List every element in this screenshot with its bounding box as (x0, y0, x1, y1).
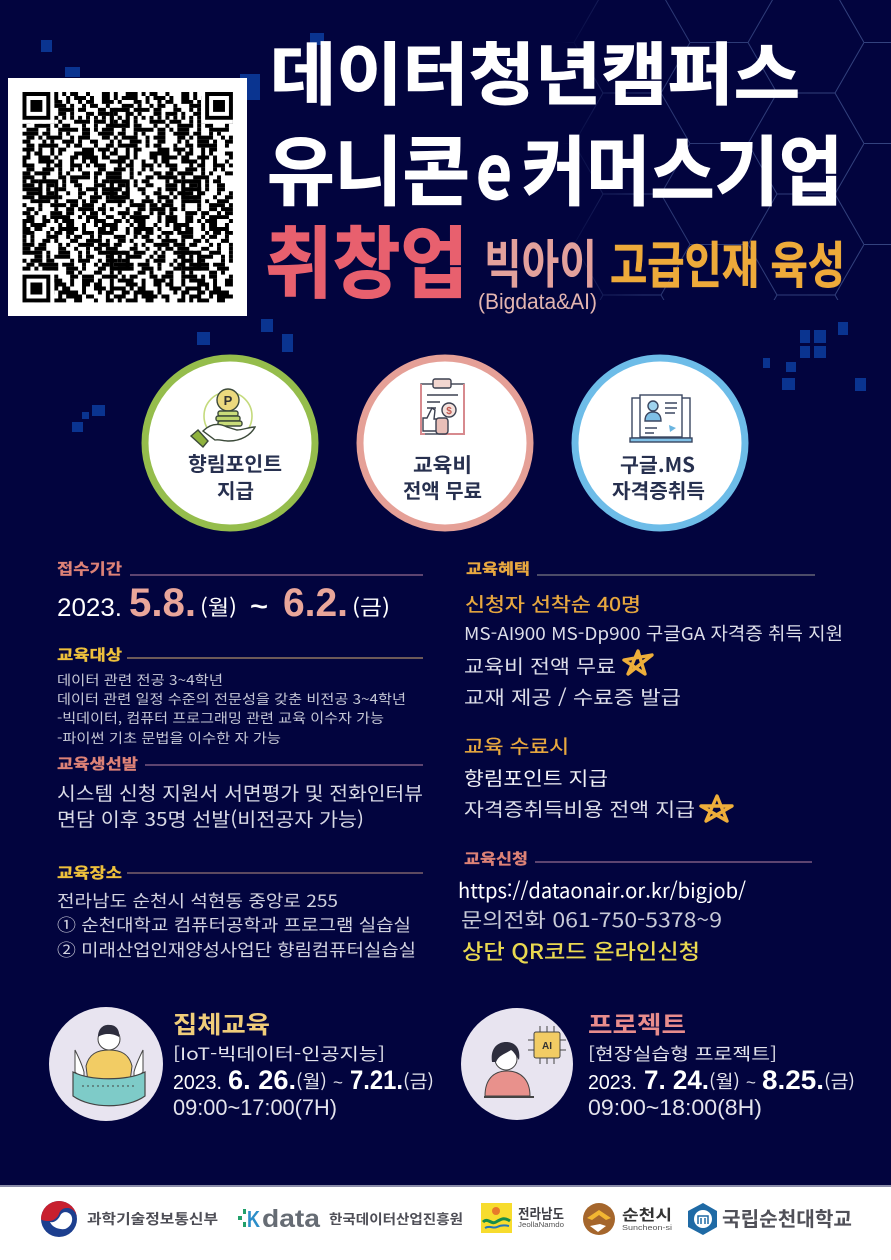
logo: Jeollanam-do: 전라남도 (518, 1204, 564, 1224)
logo: Sunchon National University: 국립순천대학교 (722, 1203, 852, 1232)
benefit badge: free tuition (360, 358, 530, 528)
panel: project: [현장실습형 프로젝트] (588, 1040, 777, 1065)
panel: application period: 5.8. (129, 581, 196, 625)
panel: location: 교육장소 (57, 862, 122, 883)
panel: location: ① 순천대학교 컴퓨터공학과 프로그램 실습실 (57, 911, 411, 936)
panel: benefits: 교육혜택 (466, 558, 530, 579)
panel: project: (월) (709, 1068, 740, 1094)
panel: classroom training: 6. 26. (228, 1065, 296, 1095)
logo: K-data: K (247, 1206, 260, 1232)
panel: benefits: 자격증취득비용 전액 지급 (464, 795, 695, 822)
logo: ministry: 과학기술정보통신부 (87, 1209, 218, 1229)
logo: ministry (41, 1201, 218, 1237)
footer: logos (0, 1185, 891, 1260)
illustration: person with AI chip (461, 1008, 573, 1120)
panel: eligibility: 데이터 관련 일정 수준의 전문성을 갖춘 비전공 3~4학년 (57, 688, 406, 708)
benefit badge: points (145, 358, 315, 528)
panel: classroom training: [IoT-빅데이터-인공지능] (173, 1040, 385, 1065)
icon: clipboard: $ (446, 406, 452, 417)
icon: laptop resume (630, 395, 692, 442)
title: (Bigdata&AI) (478, 289, 597, 314)
panel: benefits: MS-AI900 MS-Dp900 구글GA 자격증 취득 지원 (464, 620, 843, 646)
panel: location: ② 미래산업인재양성사업단 향림컴퓨터실습실 (57, 936, 416, 961)
panel: classroom training (49, 1005, 434, 1121)
panel: how to apply: 문의전화 061-750-5378~9 (461, 904, 722, 933)
logo: K-data (238, 1205, 463, 1233)
panel: project (461, 1005, 855, 1120)
benefit badge: free tuition: 교육비 (413, 449, 472, 478)
panel: application period: (금) (352, 592, 390, 622)
icon: star (624, 651, 652, 674)
panel: selection: 교육생선발 (57, 753, 138, 774)
panel: project: (금) (824, 1068, 855, 1094)
panel: benefits: 교육 수료시 (464, 732, 569, 759)
icon: coins in hand: P (224, 393, 233, 408)
benefit badge: points: 향림포인트 (188, 448, 282, 477)
panel: application period: 6.2. (283, 581, 348, 625)
panel: benefits: 향림포인트 지급 (464, 764, 608, 791)
benefit badge: certification (575, 358, 745, 528)
illustration: person with tablet (49, 1007, 163, 1121)
panel: benefits: 교육비 전액 무료 (464, 652, 616, 679)
title: 유니콘 (267, 111, 470, 221)
panel: project: 09:00~18:00(8H) (588, 1095, 762, 1120)
panel: project: 8.25. (762, 1065, 824, 1095)
panel: benefits: 교재 제공 / 수료증 발급 (464, 683, 681, 710)
panel: location (57, 862, 423, 961)
logo: K-data: data (262, 1205, 321, 1233)
benefit badge: points: 지급 (217, 475, 254, 504)
panel: how to apply: https://dataonair.or.kr/bigjob/ (458, 875, 746, 904)
title (265, 20, 845, 314)
panel: classroom training: ~ (333, 1073, 343, 1092)
panel: application period: ~ (250, 591, 268, 621)
panel: selection: 시스템 신청 지원서 서면평가 및 전화인터뷰 (57, 779, 423, 806)
title: e (476, 111, 512, 221)
title: 빅아이 (484, 223, 597, 298)
icon: coins in hand (191, 389, 255, 447)
panel: benefits: 신청자 선착순 40명 (465, 590, 641, 617)
logo: Jeollanam-do (481, 1203, 564, 1233)
panel: eligibility (57, 644, 423, 747)
logo: Suncheon: 순천시 (622, 1204, 672, 1225)
panel: how to apply: 교육신청 (464, 848, 528, 869)
icon: star (701, 796, 732, 821)
illustration: person with AI chip: AI (542, 1041, 552, 1052)
benefit badge: certification: 구글.MS (620, 449, 695, 478)
logo: Jeollanam-do: JeollaNamdo (518, 1222, 564, 1229)
panel: application period: 2023. (57, 594, 122, 622)
title: 데이터청년캠퍼스 (270, 20, 800, 119)
benefit badge: free tuition: 전액 무료 (403, 475, 482, 504)
panel: application period (57, 558, 423, 625)
benefit badge: certification: 자격증취득 (612, 475, 705, 504)
panel: how to apply (458, 848, 812, 966)
panel: how to apply: 상단 QR코드 온라인신청 (462, 936, 700, 966)
QR code (8, 78, 247, 316)
panel: eligibility: -빅데이터, 컴퓨터 프로그래밍 관련 교육 이수자 가능 (57, 707, 384, 727)
panel: project: 7. 24. (644, 1065, 709, 1095)
logo: K-data: 한국데이터산업진흥원 (329, 1208, 463, 1228)
panel: classroom training: 7.21. (350, 1065, 403, 1095)
panel: location: 전라남도 순천시 석현동 중앙로 255 (57, 887, 338, 912)
panel: eligibility: 교육대상 (57, 644, 122, 665)
panel: classroom training: (금) (403, 1068, 434, 1094)
logo: Suncheon (583, 1203, 673, 1235)
panel: project: ~ (746, 1073, 756, 1092)
panel: selection: 면담 이후 35명 선발(비전공자 가능) (57, 805, 364, 832)
logo: Suncheon: Suncheon-si (622, 1225, 673, 1232)
panel: project: 프로젝트 (588, 1005, 686, 1040)
panel: benefits (464, 558, 843, 822)
icon: clipboard (421, 379, 464, 434)
panel: eligibility: 데이터 관련 전공 3~4학년 (57, 669, 223, 689)
panel: eligibility: -파이썬 기초 문법을 이수한 자 가능 (57, 727, 281, 747)
panel: classroom training: (월) (296, 1068, 327, 1094)
panel: application period: (월) (200, 592, 237, 622)
panel: selection (57, 753, 423, 832)
panel: classroom training: 집체교육 (173, 1005, 270, 1040)
title: 커머스기업 (522, 111, 843, 221)
panel: classroom training: 09:00~17:00(7H) (173, 1095, 337, 1120)
panel: application period: 접수기간 (57, 558, 122, 579)
panel: classroom training: 2023. (173, 1072, 222, 1094)
title: 취창업 (265, 202, 468, 314)
panel: project: 2023. (588, 1072, 637, 1094)
